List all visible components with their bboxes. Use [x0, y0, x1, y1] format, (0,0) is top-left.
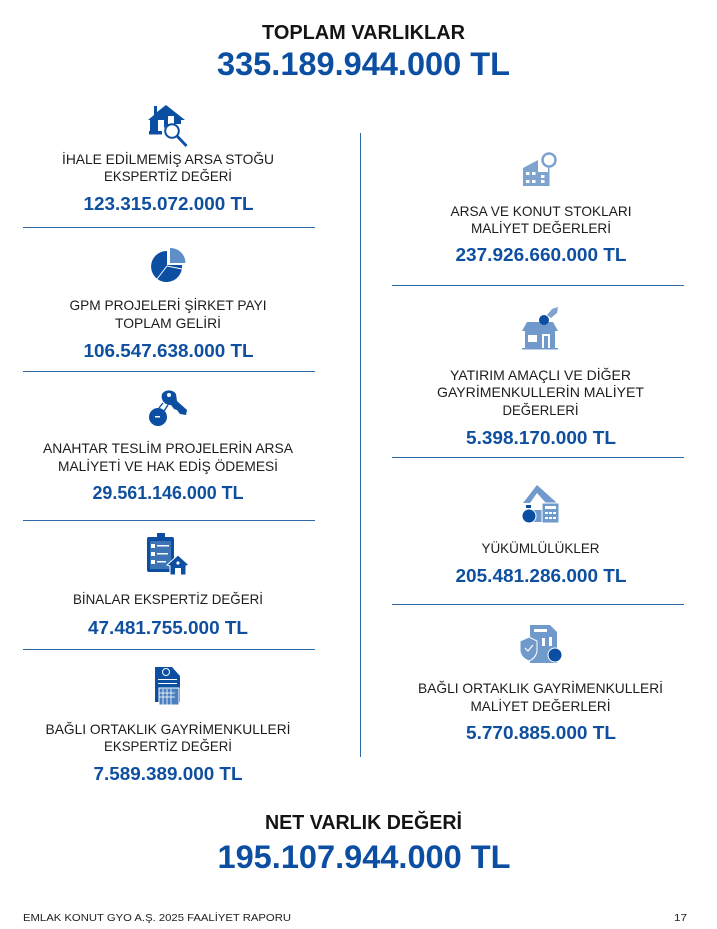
item: ihale edilmemiş arsa stoğu: İHALE EDİLMEMİŞ ARSA STOĞU	[62, 150, 274, 167]
item: yatırım amaçlı: 5.398.170.000 TL	[466, 428, 616, 448]
item: arsa ve konut stokları: 237.926.660.000 TL	[456, 245, 627, 265]
item: yatırım amaçlı	[437, 307, 644, 448]
icon: keys	[149, 390, 187, 426]
item: gpm projeleri: TOPLAM GELİRİ	[115, 314, 221, 331]
item: yatırım amaçlı: YATIRIM AMAÇLI VE DİĞER	[450, 366, 631, 383]
item: bağlı ortaklık ekspertiz: EKSPERTİZ DEĞERİ	[104, 737, 232, 754]
icon: clipboard with house	[147, 533, 189, 575]
icon: house with calculator and bag	[522, 485, 559, 523]
item: yatırım amaçlı: GAYRİMENKULLERİN MALİYET	[437, 383, 644, 400]
icon: document with shield	[520, 625, 562, 663]
item: ihale edilmemiş arsa stoğu	[62, 105, 274, 214]
footer	[23, 911, 687, 924]
icon: pie chart	[151, 248, 186, 282]
item: bağlı ortaklık ekspertiz: BAĞLI ORTAKLIK GAYRİMENKULLERİ	[46, 720, 290, 737]
item: arsa ve konut stokları: MALİYET DEĞERLERİ	[471, 219, 611, 236]
item: binalar: BİNALAR EKSPERTİZ DEĞERİ	[73, 590, 263, 607]
footer: EMLAK KONUT GYO A.Ş. 2025 FAALİYET RAPORU	[23, 911, 291, 924]
item: arsa ve konut stokları: ARSA VE KONUT STOKLARI	[450, 203, 632, 219]
heading: net varlık değeri: NET VARLIK DEĞERİ	[265, 810, 462, 834]
item: bağlı ortaklık ekspertiz	[46, 667, 290, 784]
item: binalar: 47.481.755.000 TL	[88, 618, 248, 638]
item: gpm projeleri: GPM PROJELERİ ŞİRKET PAYI	[70, 296, 266, 313]
footer: 17	[674, 912, 687, 924]
icon: house with magnifier	[148, 105, 186, 146]
item: anahtar teslim: 29.561.146.000 TL	[92, 483, 244, 503]
item: anahtar teslim: MALİYETİ VE HAK EDİŞ ÖDEMESİ	[58, 457, 278, 474]
panel: right column	[392, 154, 684, 743]
icon: building with gear	[523, 154, 556, 186]
title: toplam varlıklar: TOPLAM VARLIKLAR	[262, 22, 466, 44]
item: gpm projeleri: 106.547.638.000 TL	[84, 341, 254, 361]
item: yükümlülükler: 205.481.286.000 TL	[456, 566, 627, 586]
item: anahtar teslim: ANAHTAR TESLİM PROJELERİN ARSA	[43, 439, 294, 456]
panel: left column	[23, 105, 315, 784]
center divider	[360, 133, 362, 757]
item: ihale edilmemiş arsa stoğu: EKSPERTİZ DEĞERİ	[104, 167, 232, 184]
item: bağlı ortaklık maliyet: MALİYET DEĞERLERİ	[470, 697, 610, 714]
item: bağlı ortaklık ekspertiz: 7.589.389.000 TL	[94, 764, 242, 784]
item: arsa ve konut stokları	[450, 154, 632, 265]
item: ihale edilmemiş arsa stoğu: 123.315.072.000 TL	[84, 194, 254, 214]
item: binalar	[73, 533, 263, 638]
icon: document with building	[155, 667, 180, 705]
item: anahtar teslim	[43, 390, 294, 503]
heading: net varlık değeri	[218, 810, 510, 875]
item: yükümlülükler	[456, 485, 627, 586]
item: bağlı ortaklık maliyet	[418, 625, 663, 743]
item: bağlı ortaklık maliyet: 5.770.885.000 TL	[466, 723, 616, 743]
heading: net varlık değeri: 195.107.944.000 TL	[218, 839, 510, 875]
icon: house with coin hand	[522, 307, 558, 350]
item: yatırım amaçlı: DEĞERLERİ	[502, 401, 578, 418]
title: toplam varlıklar: 335.189.944.000 TL	[217, 46, 510, 82]
item: yükümlülükler: YÜKÜMLÜLÜKLER	[482, 539, 600, 556]
item: gpm projeleri	[70, 248, 266, 361]
title: toplam varlıklar	[217, 22, 510, 82]
item: bağlı ortaklık maliyet: BAĞLI ORTAKLIK GAYRİMENKULLERİ	[418, 679, 663, 696]
